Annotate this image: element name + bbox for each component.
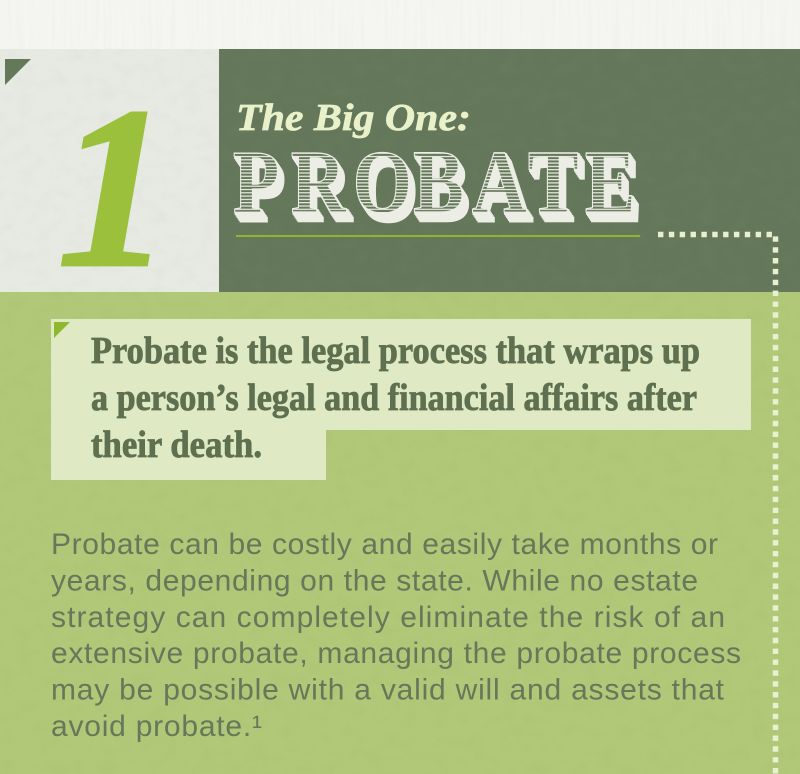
numeral 1: 1 <box>57 59 171 315</box>
dotted connector <box>658 234 776 774</box>
body text: strategy can completely eliminate the risk of an <box>51 601 725 634</box>
callout text: their death. <box>91 424 262 466</box>
panel: title header <box>219 49 800 292</box>
body text <box>51 528 741 743</box>
body text: may be possible with a valid will and assets that <box>51 674 725 706</box>
top paper strip <box>0 0 800 49</box>
heading: PROBATE: PROBATE <box>234 135 637 234</box>
heading: The Big One: The Big One: <box>236 97 471 139</box>
body text: extensive probate, managing the probate process <box>51 637 741 670</box>
heading: PROBATE: PROBATE <box>238 141 641 240</box>
title underline <box>236 235 640 237</box>
icon: corner triangle <box>5 59 31 85</box>
heading: PROBATE: PROBATE <box>237 139 640 238</box>
callout text: Probate is the legal process that wraps up <box>91 330 700 372</box>
heading: PROBATE: PROBATE <box>233 133 636 232</box>
body text: avoid probate.¹ <box>51 710 262 743</box>
icon: callout corner triangle <box>54 322 70 338</box>
heading: PROBATE: PROBATE <box>235 136 638 235</box>
callout: definition <box>51 319 751 480</box>
body text: years, depending on the state. While no estate <box>51 564 698 598</box>
panel: number block <box>0 49 219 292</box>
heading: PROBATE: PROBATE <box>239 142 642 241</box>
panel: body background <box>0 292 800 774</box>
heading: PROBATE: PROBATE <box>236 138 639 237</box>
callout text <box>91 330 700 466</box>
callout text: a person’s legal and financial affairs after <box>91 377 697 419</box>
body text: Probate can be costly and easily take months or <box>51 528 718 561</box>
